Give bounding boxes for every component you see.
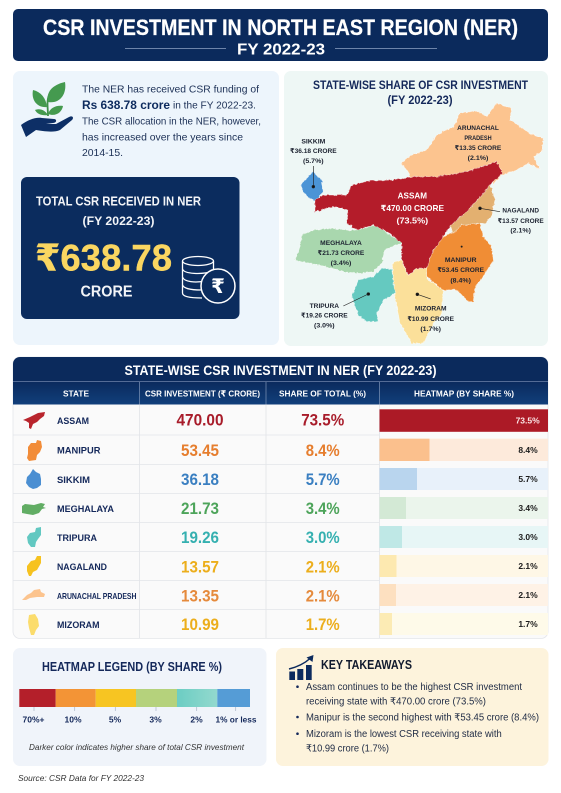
row: Mizoram: 1.7%: [306, 616, 340, 634]
label: Sikkim: SIKKIM: [301, 138, 326, 145]
row: Meghalaya: 3.4%: [306, 500, 340, 518]
label: Tripura: (3.0%): [314, 322, 335, 329]
map of NER states: [290, 103, 544, 343]
legend heading: HEATMAP LEGEND (BY SHARE %): [42, 659, 222, 674]
row: Mizoram: [28, 613, 548, 635]
row: Sikkim: SIKKIM: [57, 475, 90, 486]
legend note: Darker color indicates higher share of total CSR investment: [29, 742, 245, 752]
label: Tripura: [301, 303, 348, 329]
intro text: has increased over the years since: [82, 132, 243, 143]
legend labels: 10%: [64, 715, 82, 725]
legend labels: 70%+: [23, 715, 45, 725]
subtitle: FY 2022-23: [237, 42, 325, 58]
legend colour scale: [19, 689, 250, 711]
state: Nagaland: [450, 184, 495, 233]
row: Manipur: MANIPUR: [57, 446, 101, 456]
row: Mizoram: 10.99: [181, 616, 219, 634]
label: Nagaland: [498, 208, 544, 235]
label: Manipur: MANIPUR: [445, 257, 477, 264]
row: Mizoram: MIZORAM: [57, 620, 100, 631]
card: total CSR received: TOTAL CSR RECEIVED IN NER: [36, 194, 201, 208]
intro text: [82, 85, 261, 159]
row: Sikkim: [26, 468, 548, 490]
table title bar: [13, 357, 548, 382]
label: Mizoram: (1.7%): [420, 326, 441, 333]
map heading: STATE-WISE SHARE OF CSR INVESTMENT: [313, 80, 528, 92]
row: Assam: 470.00: [176, 412, 224, 430]
label: Arunachal Pradesh: [455, 125, 502, 162]
label: Mizoram: [407, 305, 455, 333]
label: Manipur: ₹53.45 CRORE: [437, 267, 485, 274]
row: Nagaland: [27, 555, 548, 577]
legend labels: 2%: [190, 715, 203, 725]
intro text: The CSR allocation in the NER, however,: [82, 116, 261, 128]
state: Manipur: [427, 223, 493, 302]
row: Arunachal Pradesh: 2.1%: [306, 588, 340, 606]
legend labels: 3%: [149, 715, 162, 725]
card: total CSR received: CRORE: [80, 284, 133, 300]
row: Arunachal Pradesh: 2.1%: [518, 590, 538, 600]
label: Meghalaya: [318, 240, 365, 267]
row: Sikkim: 5.7%: [306, 471, 340, 489]
row: Arunachal Pradesh: 13.35: [181, 588, 219, 606]
row: Manipur: [27, 439, 548, 461]
leader lines: [312, 166, 500, 306]
takeaways list: Assam continues to be the highest CSR investment: [306, 682, 522, 693]
row: Manipur: 8.4%: [518, 445, 538, 455]
takeaways list: ₹10.99 crore (1.7%): [306, 744, 389, 755]
map heading: (FY 2022-23): [388, 95, 453, 107]
table column headers: CSR INVESTMENT (₹ CRORE): [145, 388, 260, 398]
takeaways list: Manipur is the second highest with ₹53.45 crore (8.4%): [306, 712, 539, 723]
label: Tripura: TRIPURA: [310, 303, 339, 310]
intro text: 2014-15.: [82, 148, 123, 159]
card: total CSR received: [21, 177, 240, 319]
label: Nagaland: NAGALAND: [502, 208, 539, 215]
row: Arunachal Pradesh: [22, 584, 548, 606]
legend labels: 1% or less: [216, 715, 257, 725]
row: Manipur: 8.4%: [306, 442, 340, 460]
header banner: [13, 9, 548, 61]
label: Sikkim: (5.7%): [303, 158, 324, 165]
table title bar: STATE-WISE CSR INVESTMENT IN NER (FY 2022-23): [124, 362, 436, 378]
takeaways list: receiving state with ₹470.00 crore (73.5%): [306, 696, 486, 707]
state: Sikkim: [301, 172, 323, 202]
label: Arunachal Pradesh: (2.1%): [468, 155, 488, 162]
row: Assam: ASSAM: [57, 416, 89, 427]
row: Nagaland: 13.57: [181, 558, 219, 576]
row: Arunachal Pradesh: ARUNACHAL PRADESH: [57, 591, 136, 601]
state: Mizoram: [392, 260, 443, 343]
state: Arunachal Pradesh: [401, 103, 543, 185]
row: Manipur: 53.45: [181, 442, 219, 460]
label: Arunachal Pradesh: PRADESH: [464, 135, 492, 142]
source note: Source: CSR Data for FY 2022-23: [18, 773, 144, 783]
row: Tripura: [27, 526, 548, 548]
table column headers: HEATMAP (BY SHARE %): [414, 388, 514, 398]
label: Tripura: ₹19.26 CRORE: [301, 313, 348, 320]
state: Meghalaya: [295, 225, 403, 273]
row: Nagaland: 2.1%: [306, 558, 340, 576]
label: Arunachal Pradesh: ARUNACHAL: [457, 125, 499, 132]
row: Sikkim: 5.7%: [518, 474, 538, 484]
row: Assam: [23, 409, 548, 432]
label: Mizoram: ₹10.99 CRORE: [407, 316, 455, 323]
legend labels: 5%: [109, 715, 122, 725]
row: Tripura: 19.26: [181, 529, 219, 547]
state: Assam: [315, 162, 503, 275]
row: Meghalaya: [22, 497, 548, 519]
table: state-wise CSR investment: [13, 357, 548, 638]
icon: growth chart: [289, 655, 314, 680]
icon: rupee coins: [182, 256, 235, 303]
table column headers: [13, 382, 548, 404]
table column headers: STATE: [63, 388, 89, 398]
takeaways list: [296, 682, 539, 755]
row: Nagaland: 2.1%: [518, 561, 538, 571]
label: Sikkim: [290, 138, 337, 165]
panel: key takeaways: [276, 648, 548, 766]
label: Assam: [381, 191, 444, 225]
table column headers: SHARE OF TOTAL (%): [279, 388, 366, 398]
takeaways list: Mizoram is the lowest CSR receiving state with: [306, 729, 502, 740]
total amount: ₹638.78: [35, 238, 172, 278]
icon: plant in hand: [21, 82, 73, 137]
intro text: in the FY 2022-23.: [173, 101, 256, 112]
icon: rupee coins: ₹: [211, 276, 225, 298]
label: Manipur: [437, 257, 485, 285]
row: Tripura: TRIPURA: [57, 533, 97, 544]
row: Meghalaya: MEGHALAYA: [57, 504, 114, 515]
panel: heatmap legend: [13, 648, 266, 766]
label: Assam: ASSAM: [398, 191, 427, 201]
row: Meghalaya: 3.4%: [518, 503, 538, 513]
row: Mizoram: 1.7%: [518, 619, 538, 629]
label: Arunachal Pradesh: ₹13.35 CRORE: [455, 145, 502, 152]
label: Meghalaya: ₹21.73 CRORE: [318, 250, 365, 257]
row: Nagaland: NAGALAND: [57, 562, 107, 573]
row: Tripura: 3.0%: [518, 532, 538, 542]
card: total CSR received: (FY 2022-23): [82, 214, 155, 228]
label: Meghalaya: (3.4%): [331, 260, 351, 267]
legend labels: [23, 715, 257, 725]
row: Assam: 73.5%: [301, 412, 344, 430]
intro text: The NER has received CSR funding of: [82, 85, 259, 96]
label: Assam: (73.5%): [396, 215, 428, 225]
map heading: [313, 80, 528, 107]
label: Sikkim: ₹36.18 CRORE: [290, 148, 337, 155]
intro text: Rs 638.78 crore: [82, 98, 170, 112]
label: Mizoram: MIZORAM: [415, 305, 447, 312]
label: Meghalaya: MEGHALAYA: [320, 240, 362, 247]
label: Assam: ₹470.00 CRORE: [381, 203, 444, 213]
label: Manipur: (8.4%): [450, 278, 471, 285]
row: Sikkim: 36.18: [181, 471, 219, 489]
row: Tripura: 3.0%: [306, 529, 340, 547]
row: Meghalaya: 21.73: [181, 500, 219, 518]
label: Nagaland: (2.1%): [510, 228, 531, 235]
takeaways heading: KEY TAKEAWAYS: [321, 657, 412, 672]
row: Assam: 73.5%: [516, 416, 540, 426]
panel: state-wise share map: [284, 71, 548, 346]
state: Tripura: [352, 268, 395, 322]
label: Nagaland: ₹13.57 CRORE: [498, 218, 544, 225]
